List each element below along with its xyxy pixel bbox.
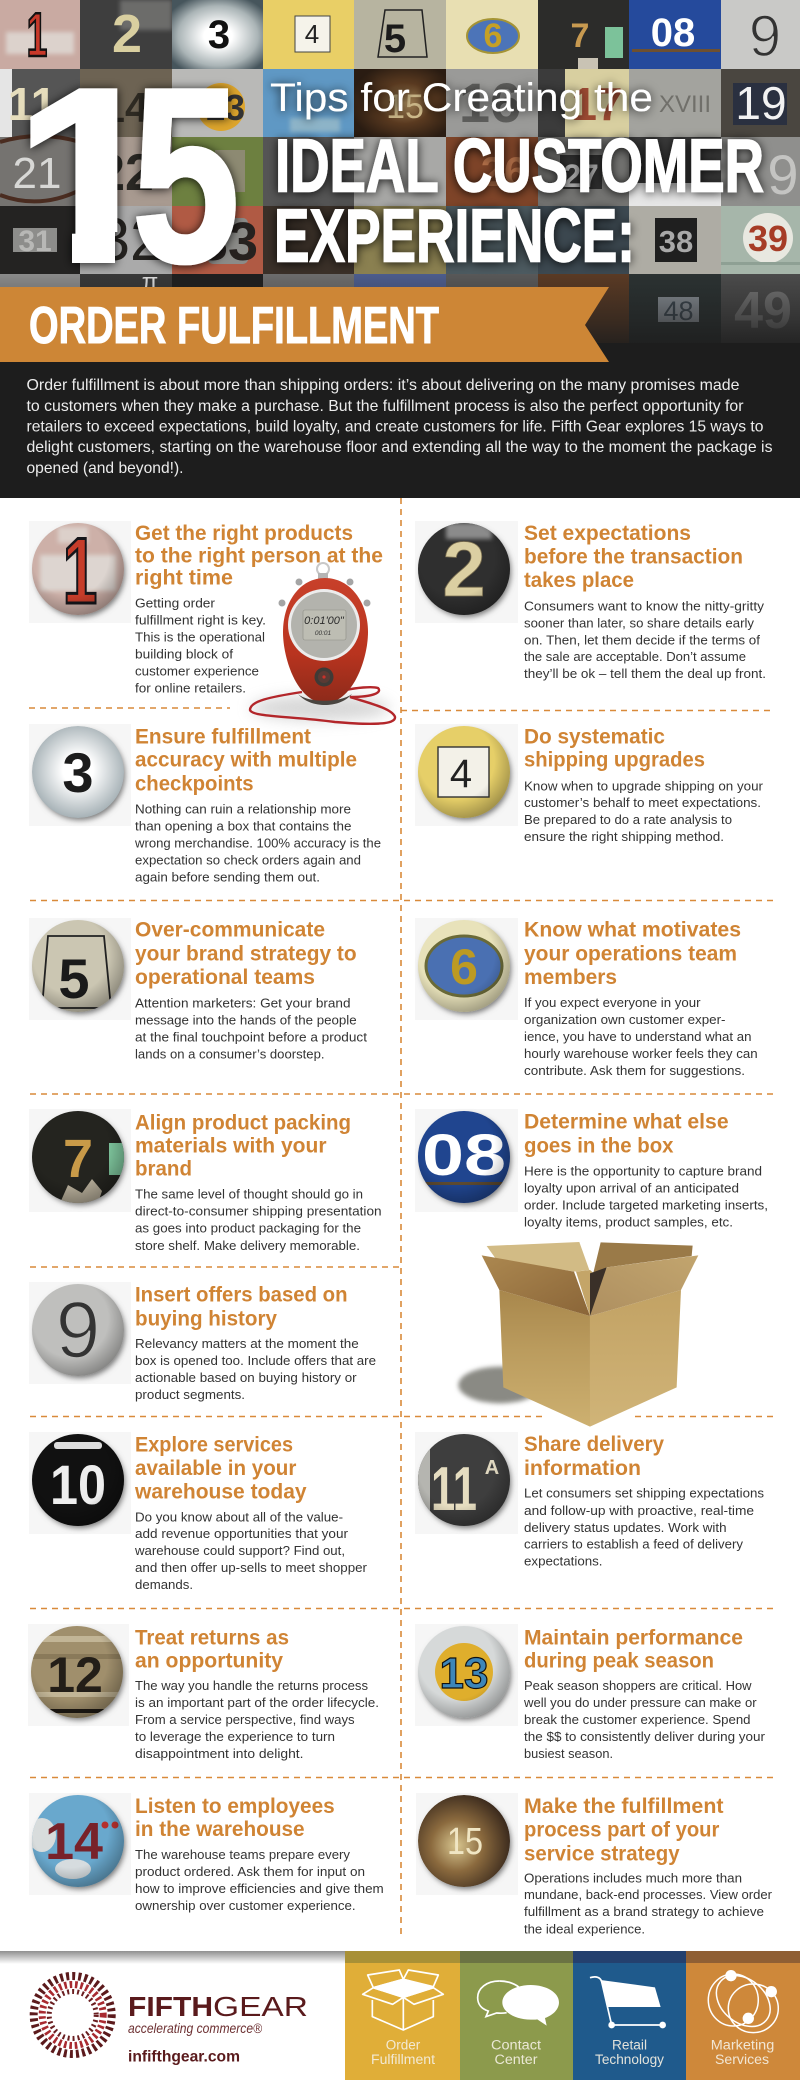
heading: materials with your (135, 1135, 326, 1158)
panel: retail technology (573, 1951, 686, 2080)
icon: number 2 badge (415, 521, 518, 623)
heading (135, 725, 357, 795)
heading (135, 1111, 351, 1181)
icon: orbit circles (706, 1965, 780, 2037)
panel: marketing services (686, 1951, 800, 2080)
icon: number 3 badge: 3 (62, 741, 94, 804)
title line: Tips for Creating the: Tips for Creating the (270, 76, 653, 120)
tip 15 (416, 1793, 773, 1937)
heading: buying history (135, 1307, 277, 1330)
icon: number 11A badge: 11 (431, 1455, 477, 1524)
label: Retail (612, 2038, 647, 2052)
heading (135, 919, 357, 989)
heading: Do systematic (524, 725, 665, 748)
heading: members (524, 966, 617, 989)
heading: Determine what else (524, 1111, 729, 1134)
heading (135, 522, 383, 589)
body text (524, 778, 764, 844)
body text: Attention marketers: Get your brand (135, 995, 350, 1010)
body text: how to improve efficiencies and give them (135, 1881, 384, 1896)
icon: number 6 badge (415, 918, 518, 1020)
label (371, 2038, 435, 2067)
label: Fulfillment (371, 2052, 435, 2067)
heading (524, 1795, 724, 1865)
heading: in the warehouse (135, 1818, 305, 1841)
heading: process part of your (524, 1819, 719, 1842)
heading: Over-communicate (135, 919, 325, 942)
icon: number 4 badge (415, 724, 518, 826)
body text: If you expect everyone in your (524, 995, 701, 1010)
body text: for online retailers. (135, 680, 246, 695)
ribbon banner: Order Fulfillment: ORDER FULFILLMENT (29, 297, 439, 355)
icon: red stopwatch: 00:01 (315, 630, 332, 637)
heading (134, 1433, 307, 1503)
body text: actionable based on buying history or (135, 1370, 357, 1385)
label: Marketing (711, 2038, 774, 2052)
tile details and numerals: 08 (651, 11, 695, 55)
tip 12 (28, 1624, 379, 1761)
body text (524, 1164, 768, 1229)
body text: lands on a consumer’s doorstep. (135, 1046, 324, 1061)
intro paragraph: to customers when they make a purchase. But the fulfillment process is also the perfect opportunity for (26, 398, 743, 415)
body text: expectation so check orders again and (135, 852, 361, 867)
tip 7 (29, 1109, 382, 1253)
tile details and numerals: 39 (748, 218, 788, 259)
tip 11 (415, 1432, 764, 1568)
footer (0, 1951, 800, 2080)
icon: shopping cart (590, 1977, 666, 2028)
tile details and numerals: 16 (459, 71, 521, 134)
logo: Fifth Gear ring (34, 1976, 112, 2054)
icon: red stopwatch (250, 563, 395, 724)
body text: loyalty upon arrival of an anticipated (524, 1180, 739, 1195)
intro paragraph: delight customers, starting on the warehouse floor and extending all the way to the moment the package is (26, 439, 773, 456)
heading: shipping upgrades (524, 749, 705, 772)
body text: Let consumers set shipping expectations (524, 1485, 764, 1500)
body text: Be prepared to do a rate analysis to (524, 812, 732, 827)
icon: number 7 badge: 7 (63, 1129, 93, 1189)
body text: again before sending them out. (135, 870, 320, 885)
tile details and numerals: 14 (102, 84, 149, 131)
heading: Listen to employees (135, 1795, 335, 1818)
icon: number 12 badge: 12 (47, 1647, 103, 1703)
tip 13 (415, 1624, 766, 1761)
tile details and numerals (0, 0, 800, 340)
body text (135, 1847, 384, 1913)
body text: the ideal experience. (524, 1922, 645, 1937)
heading (524, 1111, 729, 1158)
body text: Do you know about all of the value- (135, 1510, 343, 1524)
tip 5 (29, 918, 367, 1061)
tile details and numerals: 49 (734, 282, 792, 340)
heading: Insert offers based on (135, 1284, 348, 1307)
tile details and numerals: 5 (384, 17, 406, 61)
heading: checkpoints (135, 772, 254, 795)
body text: they’ll be ok – tell them the deal up front. (524, 666, 766, 681)
heading (135, 1626, 289, 1673)
tile details and numerals: 7 (571, 17, 589, 55)
body text (135, 1187, 382, 1253)
heading (135, 1795, 335, 1841)
body text: is an important part of the order lifecycle. (135, 1695, 379, 1710)
tile details and numerals: 15 (386, 88, 424, 126)
body text: on. Then, let them decide if the terms of (524, 632, 760, 647)
body text (523, 1678, 766, 1761)
body text: break the customer experience. Spend (524, 1712, 750, 1727)
intro paragraph (26, 377, 773, 477)
icon: number 14 badge: 14 (45, 1813, 103, 1871)
body text: hourly warehouse worker feels they can (524, 1046, 758, 1061)
body text (135, 995, 367, 1061)
body text: store shelf. Make delivery memorable. (135, 1238, 360, 1253)
big number 15 (23, 82, 243, 274)
body text: The way you handle the returns process (135, 1678, 368, 1693)
heading (524, 919, 741, 989)
body text: and follow-up with proactive, real-time (524, 1503, 754, 1518)
body text: at the final touchpoint before a product (135, 1029, 367, 1044)
icon: number 1 badge: 1 (63, 518, 97, 623)
tile details and numerals: 9 (749, 4, 781, 69)
icon: number 13 badge (415, 1624, 518, 1726)
body text (134, 802, 381, 885)
body text: Operations includes much more than (524, 1870, 742, 1886)
body text: organization own customer exper- (524, 1012, 726, 1027)
tile details and numerals: 11 (8, 78, 56, 130)
icon: number 12 badge (28, 1624, 129, 1726)
heading: Make the fulfillment (524, 1795, 724, 1818)
body text: direct-to-consumer shipping presentation (135, 1204, 382, 1219)
body text: contribute. Ask them for suggestions. (524, 1063, 745, 1078)
heading (524, 725, 705, 772)
label: Technology (595, 2052, 664, 2067)
icon: number 11A badge (415, 1432, 518, 1534)
intro paragraph: opened (and beyond!). (26, 460, 184, 477)
body text: fulfillment right is key. (135, 612, 266, 628)
heading (524, 1433, 664, 1480)
body text: Peak season shoppers are critical. How (524, 1678, 752, 1693)
tile details and numerals: 21 (13, 149, 61, 198)
label (595, 2038, 664, 2067)
tile details and numerals: 4 (305, 19, 319, 49)
body text: box is opened too. Include offers that are (135, 1353, 376, 1368)
icon: number 9 badge (29, 1282, 131, 1384)
body text: wrong merchandise. 100% accuracy is the (134, 835, 381, 850)
icon: number 7 badge (29, 1109, 131, 1212)
body text: This is the operational (135, 629, 265, 644)
body text: mundane, back-end processes. View order (524, 1887, 773, 1902)
body text: add revenue opportunities that your (135, 1526, 349, 1541)
body text: building block of (135, 646, 233, 661)
icon: number 6 badge: 6 (450, 939, 478, 995)
logo wordmark: accelerating commerce® (128, 2020, 263, 2036)
body text: warehouse could support? Find out, (134, 1543, 345, 1558)
tile details and numerals: 48 (663, 296, 694, 326)
tile details and numerals: 26 (481, 148, 527, 195)
heading: Ensure fulfillment (135, 725, 311, 748)
body text: order. Include targeted marketing inserts, (524, 1197, 768, 1212)
heading: Treat returns as (135, 1626, 289, 1649)
heading: information (524, 1457, 641, 1480)
icon: number 3 badge (29, 724, 131, 826)
body text: loyalty items, product samples, etc. (524, 1214, 733, 1229)
body text: product ordered. Ask them for input on (135, 1864, 365, 1879)
body text: The warehouse teams prepare every (135, 1847, 350, 1862)
body text: as goes into product packaging for the (135, 1221, 361, 1236)
intro paragraph: Order fulfillment is about more than shipping orders: it’s about delivering on the many promises made (26, 377, 740, 394)
icon: number 11A badge: A (485, 1457, 499, 1479)
tile details and numerals: 22 (96, 144, 154, 202)
logo wordmark (128, 1991, 308, 2066)
label: Contact (491, 2038, 541, 2052)
icon: cardboard box (458, 1242, 698, 1427)
logo wordmark: GEAR (213, 1991, 308, 2022)
heading: your brand strategy to (135, 943, 357, 966)
body text: ownership over customer experience. (135, 1898, 356, 1913)
logo wordmark: FIFTH (128, 1991, 213, 2022)
body text: Getting order (135, 596, 216, 611)
heading: Align product packing (135, 1111, 351, 1134)
body text: expectations. (524, 1554, 602, 1568)
heading: Explore services (135, 1433, 293, 1456)
icon: number 08 badge (415, 1109, 518, 1212)
tile details and numerals: 32 (97, 206, 163, 273)
body text: well you do under pressure can make or (523, 1695, 757, 1710)
icon: number 2 badge: 2 (442, 525, 486, 613)
icon: speech bubbles (478, 1981, 559, 2026)
body text: ience, you have to understand what an (524, 1029, 752, 1044)
tile details and numerals: π (142, 269, 158, 296)
body text (135, 596, 266, 695)
icon: number 10 badge: 10 (50, 1453, 106, 1516)
icon: number 15 badge (416, 1793, 518, 1895)
heading: brand (135, 1158, 192, 1181)
body text: disappointment into delight. (135, 1746, 304, 1761)
label: Center (494, 2052, 538, 2067)
heading: an opportunity (135, 1650, 283, 1673)
label: Order (386, 2038, 421, 2052)
intro paragraph: retailers to exceed expectations, build loyalty, and create customers for life. Fifth Gear explores 15 ways to (26, 418, 764, 436)
heading: to the right person at the (135, 544, 383, 567)
big number 15: 1 (14, 37, 166, 314)
body text: than opening a box that contains the (135, 818, 352, 833)
background header panel (0, 0, 800, 498)
body text: Nothing can ruin a relationship more (135, 802, 351, 817)
label: Services (715, 2052, 769, 2067)
tile details and numerals: 3 (208, 13, 230, 57)
heading: Set expectations (524, 522, 691, 545)
body text: ensure the right shipping method. (524, 829, 724, 844)
icon: number 14 badge (28, 1793, 131, 1895)
icon: red stopwatch: 0:01'00" (304, 615, 345, 627)
tip 6 (415, 918, 758, 1078)
icon: number 1 badge (29, 518, 131, 623)
tile details and numerals: 19 (735, 77, 787, 129)
tip 4 (415, 724, 764, 844)
heading: takes place (524, 569, 634, 592)
heading: Get the right products (135, 522, 353, 545)
tip 1 (29, 518, 383, 695)
body text (135, 1678, 379, 1761)
body text (135, 1336, 376, 1402)
heading: operational teams (135, 966, 315, 989)
heading: your operations team (524, 943, 737, 966)
heading: Maintain performance (524, 1626, 743, 1649)
body text (524, 598, 766, 681)
tile details and numerals: 27 (563, 158, 599, 194)
body text: Here is the opportunity to capture brand (524, 1164, 762, 1179)
label (711, 2038, 774, 2067)
heading: during peak season (524, 1650, 714, 1673)
logo wordmark: infifthgear.com (128, 2049, 240, 2066)
icon: number 15 badge: 15 (447, 1821, 483, 1863)
heading: accuracy with multiple (135, 749, 357, 772)
tile details and numerals: XVIII (659, 91, 711, 118)
panel: contact center (460, 1951, 573, 2080)
tip 8 (415, 1109, 768, 1229)
icon: number 5 badge (29, 918, 131, 1020)
icon: open box (363, 1970, 443, 2030)
body text (134, 1510, 368, 1592)
body text: Know when to upgrade shipping on your (524, 778, 764, 793)
tile details and numerals: 9 (767, 143, 799, 206)
number tile mosaic (0, 0, 800, 364)
body text: customer experience (135, 663, 259, 678)
body text: busiest season. (524, 1746, 613, 1761)
body text: the $$ to consistently deliver during your (524, 1729, 766, 1744)
heading: Share delivery (524, 1433, 664, 1456)
body text: carriers to establish a feed of delivery (524, 1536, 743, 1552)
body text: The same level of thought should go in (135, 1187, 363, 1202)
heading (524, 522, 743, 592)
body text: and then offer up-sells to meet shopper (135, 1560, 368, 1575)
title line: EXPERIENCE:: EXPERIENCE: (274, 194, 635, 278)
heading: warehouse today (134, 1480, 307, 1503)
body text: fulfillment as a brand strategy to achieve (524, 1904, 764, 1919)
body text: product segments. (135, 1387, 245, 1402)
heading: before the transaction (524, 545, 743, 568)
tile details and numerals: 6 (484, 17, 502, 55)
tip 10 (29, 1432, 368, 1592)
heading: Know what motivates (524, 919, 741, 942)
body text (524, 995, 758, 1078)
tile details and numerals: 33 (198, 212, 258, 272)
tile details and numerals: 38 (659, 224, 693, 259)
icon: number 9 badge: 9 (56, 1285, 100, 1374)
dashed grid dividers (29, 498, 777, 1936)
heading: service strategy (524, 1842, 680, 1865)
tip 14 (28, 1793, 384, 1913)
body text: the sale are acceptable. Don’t assume (524, 649, 746, 664)
body text (524, 1870, 773, 1937)
body text: demands. (135, 1577, 193, 1592)
body text: message into the hands of the people (135, 1012, 357, 1027)
body text: customer’s behalf to meet expectations. (524, 795, 761, 810)
body text: to leverage the experience to turn (135, 1729, 335, 1744)
tile details and numerals: 17 (571, 78, 623, 130)
panel: order fulfillment (345, 1951, 460, 2080)
icon: number 4 badge: 4 (450, 752, 472, 796)
heading: goes in the box (524, 1135, 674, 1158)
icon: number 13 badge: 13 (440, 1649, 488, 1698)
heading (135, 1284, 348, 1330)
heading: available in your (135, 1457, 296, 1480)
label (491, 2038, 541, 2067)
big number 15: 5 (132, 38, 240, 315)
tile details and numerals: 31 (18, 225, 52, 258)
body text: Consumers want to know the nitty-gritty (524, 598, 764, 613)
icon: number 08 badge: 08 (422, 1123, 506, 1188)
tile details and numerals: 13 (205, 87, 245, 128)
tile details and numerals: 1 (27, 0, 47, 69)
body text: sooner than later, so share details early (524, 615, 754, 630)
tip 3 (29, 724, 381, 885)
body text (524, 1485, 764, 1568)
tile details and numerals: 2 (112, 4, 142, 64)
heading (524, 1626, 743, 1673)
body text: Relevancy matters at the moment the (135, 1336, 359, 1351)
icon: number 5 badge: 5 (58, 947, 90, 1010)
body text: From a service perspective, find ways (135, 1712, 355, 1727)
tip 9 (29, 1282, 376, 1402)
heading: right time (135, 566, 233, 589)
body text: delivery status updates. Work with (524, 1520, 726, 1535)
tip 2 (415, 521, 766, 681)
icon: number 10 badge (29, 1432, 131, 1534)
